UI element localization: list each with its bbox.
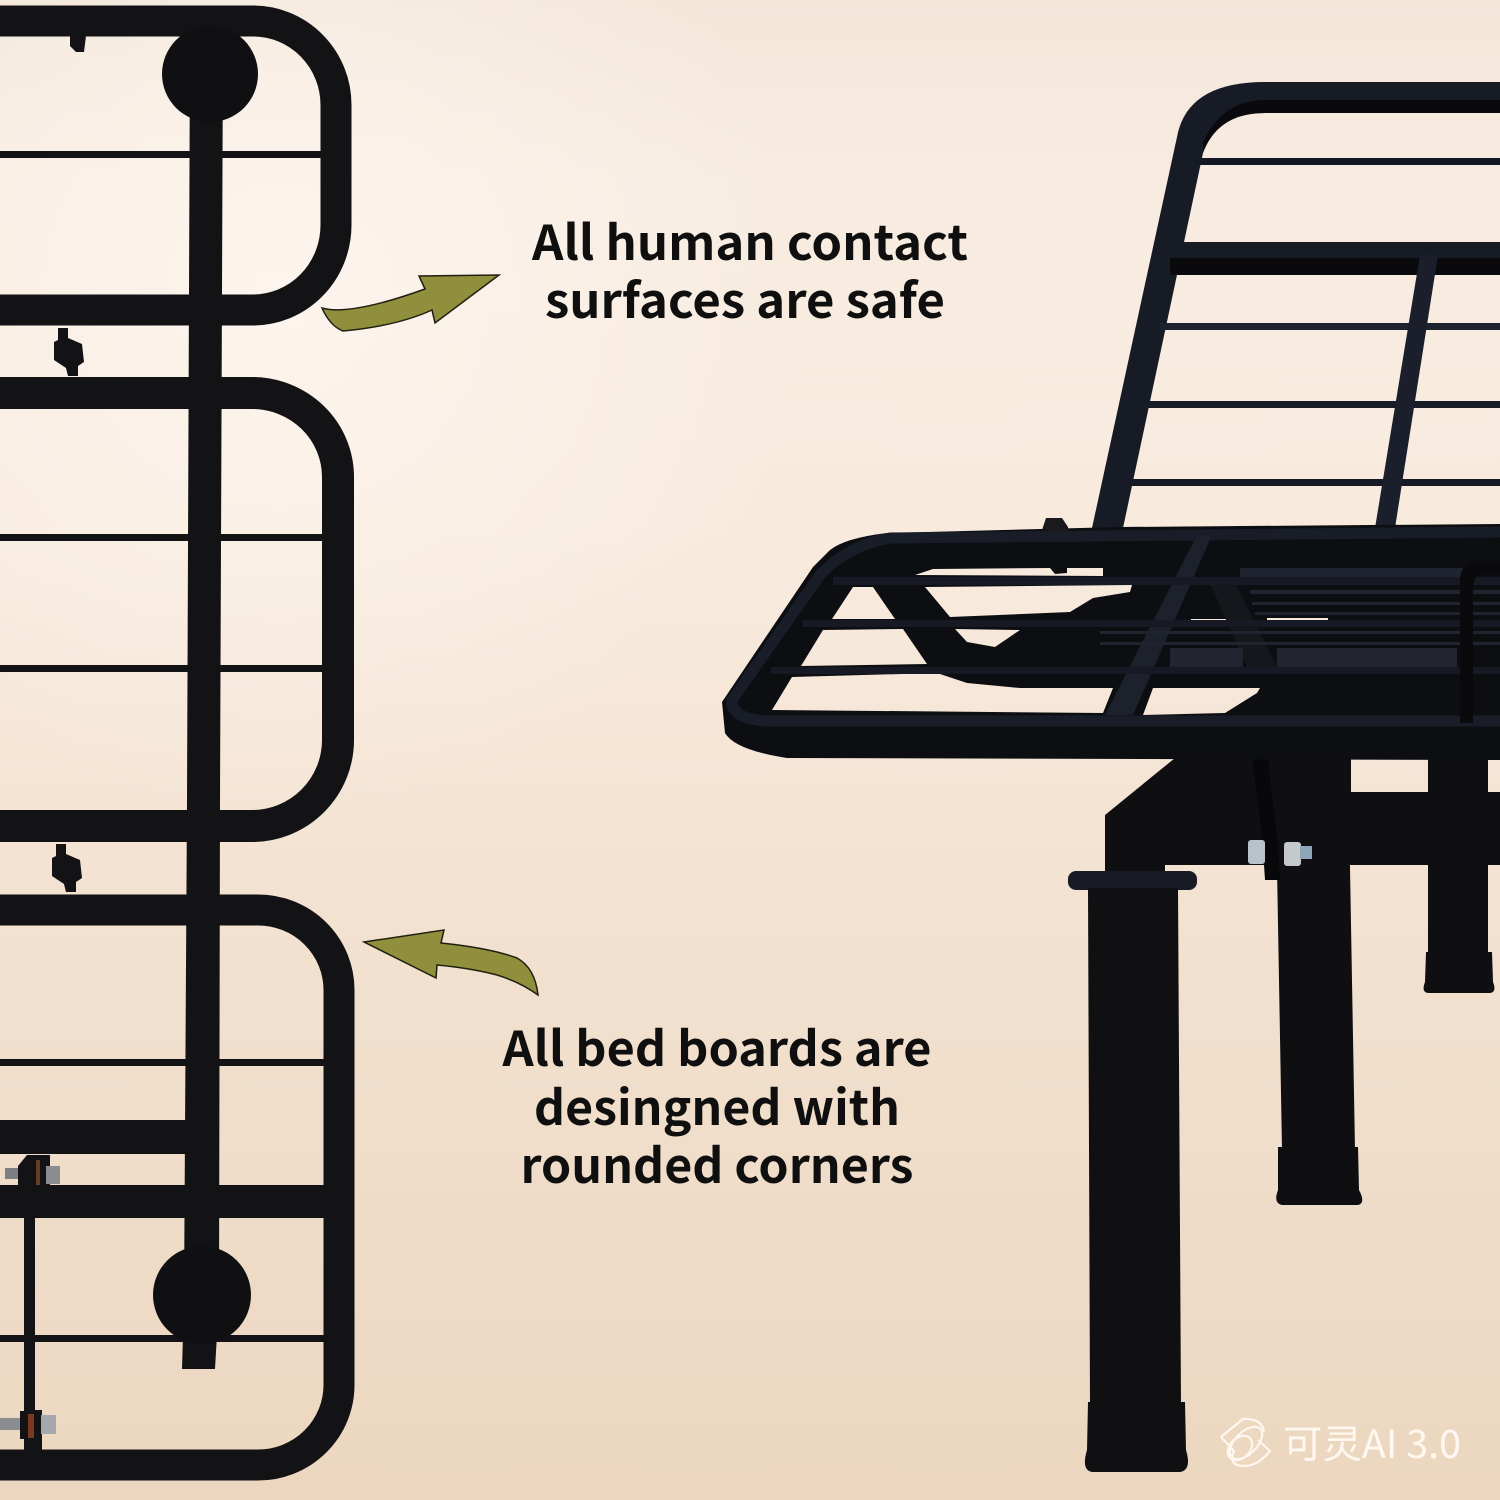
small seat bolt bbox=[1042, 518, 1068, 532]
bolt: upper bbox=[5, 1155, 60, 1185]
seat frame bbox=[722, 524, 1500, 760]
under-frame bar and back legs bbox=[1105, 755, 1500, 1205]
clip connector: top bbox=[70, 36, 86, 52]
clip connector: upper bbox=[54, 328, 84, 376]
caption: rounded corners: desingned with bbox=[534, 1069, 900, 1139]
caption: rounded corners: All bed boards are bbox=[501, 1010, 932, 1080]
front leg with foot plate bbox=[1068, 871, 1197, 1472]
right bed frame, side view bbox=[722, 82, 1500, 1472]
frame panel: upper head section bbox=[0, 21, 336, 310]
suction disc: bottom bbox=[153, 1246, 251, 1344]
caption: human contact: All human contact bbox=[531, 204, 968, 274]
arrow: to rounded corners bbox=[364, 930, 538, 995]
watermark text: 可灵AI 3.0 bbox=[1283, 1414, 1461, 1470]
clip connector: lower bbox=[52, 844, 82, 892]
caption: human contact bbox=[531, 204, 968, 332]
backrest frame bbox=[1092, 82, 1500, 528]
watermark bbox=[1221, 1414, 1461, 1470]
central spine rail bbox=[182, 38, 223, 1369]
upright hook rail bbox=[1460, 563, 1500, 723]
left bed frame, top view bbox=[0, 21, 339, 1465]
caption: rounded corners bbox=[501, 1010, 932, 1197]
suction disc: top bbox=[162, 26, 258, 122]
arrow: to contact surfaces bbox=[322, 275, 499, 331]
frame panel: lower section bbox=[0, 910, 339, 1465]
caption: human contact: surfaces are safe bbox=[545, 262, 945, 332]
cross slats bbox=[0, 151, 325, 1450]
frame panel: middle section bbox=[0, 393, 338, 826]
seat shading bbox=[732, 532, 1500, 721]
icon: watermark logo bbox=[1221, 1419, 1270, 1466]
bolt bracket bbox=[1248, 757, 1312, 880]
bolt: lower bbox=[0, 1410, 56, 1452]
caption: rounded corners: rounded corners bbox=[520, 1127, 914, 1197]
